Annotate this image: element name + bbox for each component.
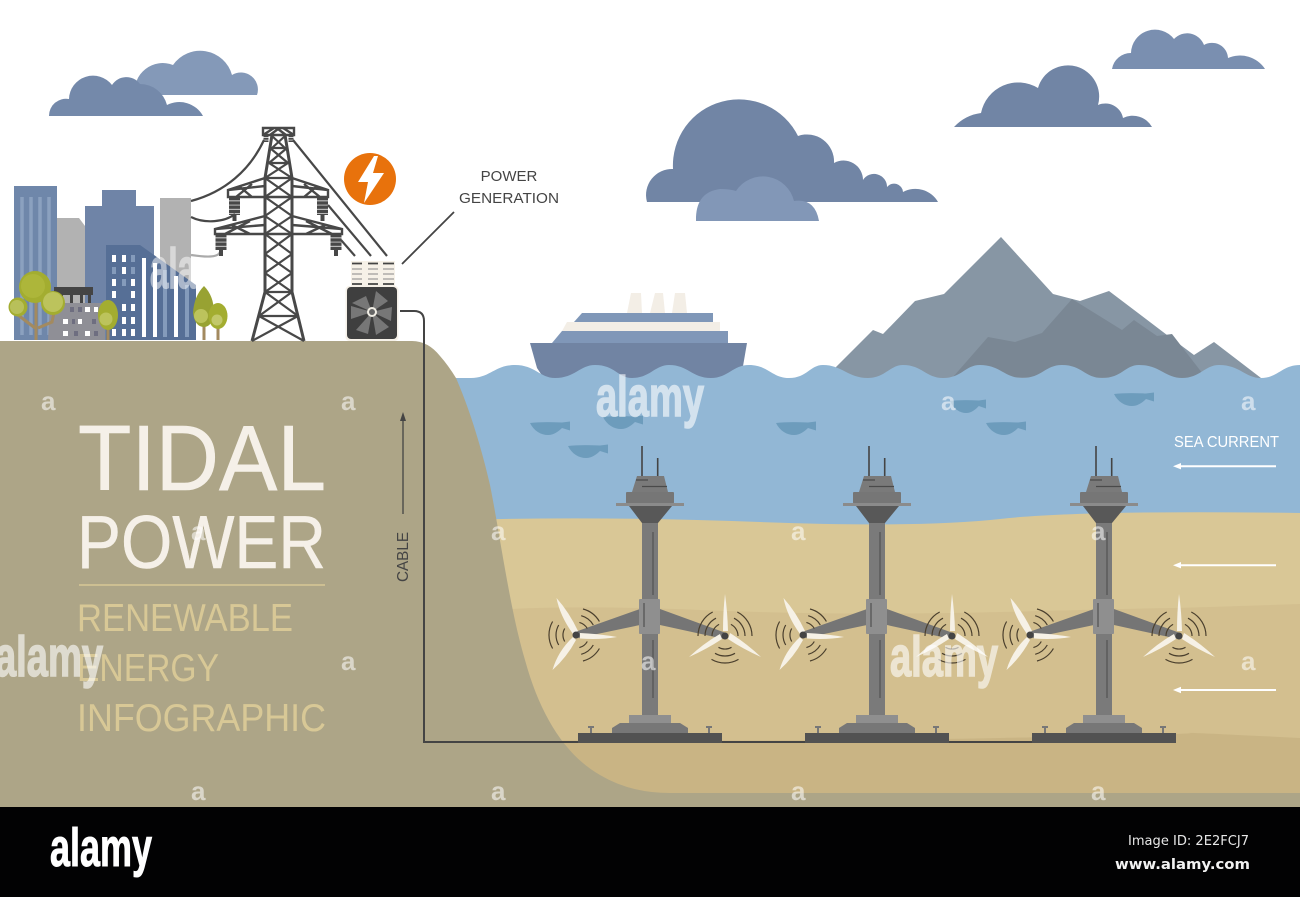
watermarks: alamy	[596, 365, 704, 429]
city	[8, 186, 228, 340]
building: blue middle	[85, 190, 154, 340]
land cliff	[0, 341, 1300, 807]
mountains	[836, 237, 1261, 378]
watermarks: a	[341, 386, 356, 416]
cloud: large centre front	[696, 176, 819, 221]
watermarks: a	[941, 386, 956, 416]
watermarks: a	[1091, 516, 1106, 546]
tower insulators	[221, 135, 336, 256]
watermarks: alamy	[890, 625, 998, 689]
mountain: front range	[953, 299, 1206, 378]
power generation label: GENERATION	[459, 190, 559, 207]
building: grey right	[160, 198, 191, 288]
sea	[440, 365, 1300, 530]
turbine 3	[1003, 446, 1215, 743]
transformer insulators	[351, 261, 395, 287]
tree: large left	[8, 271, 65, 340]
building: grey	[57, 218, 85, 340]
watermarks: ala	[150, 237, 197, 301]
title: tidal: TIDAL	[78, 406, 326, 510]
icon: lightning badge	[344, 153, 396, 205]
watermarks: a	[791, 776, 806, 806]
sea current labels and arrows	[1173, 434, 1279, 693]
transmission tower	[191, 128, 387, 341]
mountain: back range	[836, 237, 1261, 378]
turbine 1	[549, 446, 761, 743]
watermarks: a	[1241, 646, 1256, 676]
sea current labels and arrows: SEA CURRENT	[1174, 434, 1279, 451]
cable	[400, 311, 1032, 742]
building: left tower	[14, 186, 57, 340]
watermarks	[0, 237, 1256, 806]
title: power: POWER	[77, 500, 326, 584]
subtitle: ENERGY	[77, 647, 219, 690]
watermarks: a	[41, 386, 56, 416]
watermarks: a	[191, 516, 206, 546]
cable label with arrow: CABLE	[395, 532, 412, 582]
watermarks: a	[1091, 776, 1106, 806]
turbine 2	[776, 446, 988, 743]
subtitle	[77, 597, 326, 740]
tree: pair right	[193, 286, 228, 340]
fan box	[346, 286, 398, 341]
cloud: large centre	[646, 99, 938, 202]
ship	[530, 293, 747, 380]
cloud: upper right	[954, 65, 1152, 127]
watermarks: a	[641, 646, 656, 676]
watermarks: a	[791, 516, 806, 546]
power generation label	[402, 168, 559, 264]
sand seabed	[460, 512, 1300, 800]
footer logo: alamy	[50, 818, 152, 878]
subtitle: RENEWABLE	[77, 597, 293, 640]
watermarks: a	[1241, 386, 1256, 416]
footer band	[0, 807, 1300, 897]
footer image id: Image ID: 2E2FCJ7	[1128, 833, 1249, 849]
title block	[77, 406, 326, 740]
power generation label: POWER	[481, 168, 537, 185]
subtitle: INFOGRAPHIC	[77, 697, 326, 740]
watermarks: a	[491, 776, 506, 806]
watermarks: a	[191, 776, 206, 806]
fish	[530, 392, 1154, 458]
cloud: top left back	[135, 51, 258, 95]
cloud: far right	[1112, 30, 1265, 69]
watermarks: a	[491, 516, 506, 546]
tree: small centre	[98, 300, 118, 340]
transformer and fan unit	[346, 261, 398, 341]
cloud: top left front	[49, 76, 203, 116]
building: dark blue windows	[106, 245, 196, 340]
footer url: www.alamy.com	[1115, 857, 1250, 873]
watermarks: a	[341, 646, 356, 676]
power lines	[191, 140, 387, 257]
building: low grey	[48, 287, 105, 340]
cable label with arrow	[395, 412, 412, 582]
